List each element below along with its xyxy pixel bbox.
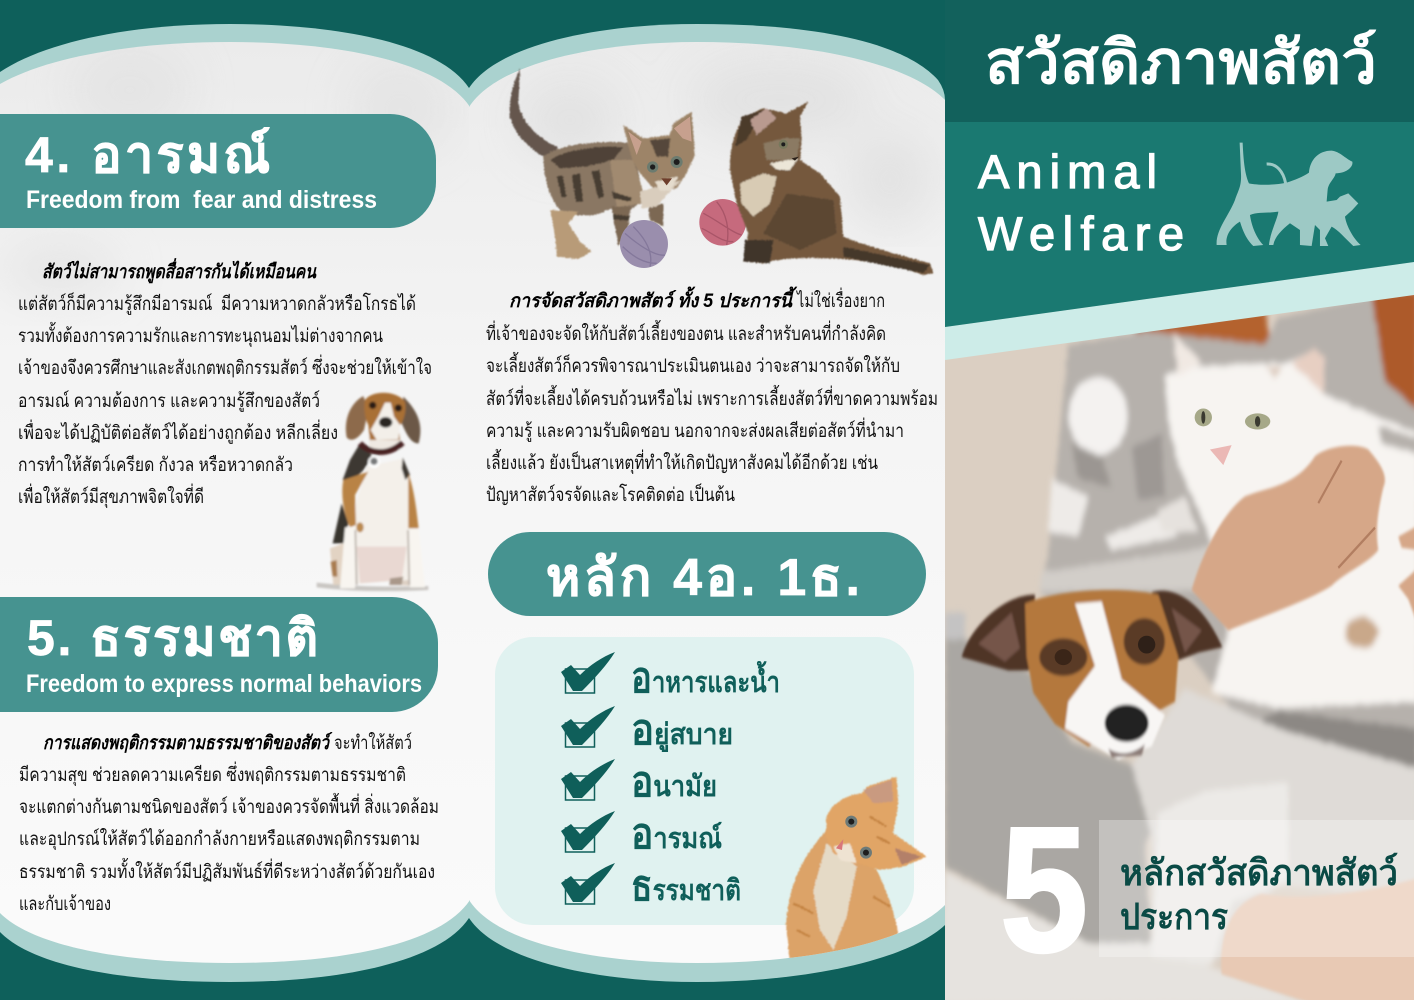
orange kitten face: [836, 816, 872, 859]
text block: nature: จะทำให้สัตว์: [334, 732, 412, 754]
caption text: [1120, 852, 1398, 937]
text block: emotion: เพื่อให้สัตว์มีสุขภาพจิตใจที่ดี: [18, 483, 204, 509]
text block: emotion: รวมทั้งต้องการความรักและการทะนุถนอมไม่ต่างจากคน: [18, 322, 383, 348]
heading pill 4: [0, 114, 436, 228]
title: สวัสดิภาพสัตว์: [985, 29, 1377, 96]
item: nature: [561, 862, 741, 909]
text block: intro: ปัญหาสัตว์จรจัดและโรคติดต่อ เป็นต้น: [486, 482, 735, 506]
caption band: [1099, 820, 1414, 957]
item: hygiene: อนามัย: [631, 758, 717, 805]
panel: right header: [945, 0, 1414, 327]
text block: nature: มีความสุข ช่วยลดความเครียด ซึ่งพฤติกรรมตามธรรมชาติ: [19, 761, 406, 787]
illustration: orange kitten: [786, 777, 927, 963]
text block: emotion: เพื่อจะได้ปฏิบัติต่อสัตว์ได้อย่างถูกต้อง หลีกเลี่ยง: [18, 419, 338, 444]
illustration: beagle: [317, 393, 428, 591]
heading pill 5: Freedom to express normal behaviors: [26, 670, 422, 698]
text block: intro: [486, 286, 938, 506]
heading pill 4: 4. อารมณ์: [25, 127, 270, 183]
big number 5: 5: [1000, 790, 1088, 989]
text block: emotion: เจ้าของจึงควรศึกษาและสังเกตพฤติกรรมสัตว์ ซึ่งจะช่วยให้เข้าใจ: [18, 354, 432, 379]
item: food and water: อาหารและน้ำ: [631, 654, 780, 701]
decorative strip: [945, 262, 1414, 360]
text block: intro: การจัดสวัสดิภาพสัตว์ ทั้ง 5 ประการนี้: [509, 286, 798, 312]
item: nature: ธรรมชาติ: [631, 862, 741, 909]
text block: emotion: อารมณ์ ความต้องการ และความรู้สึกของสัตว์: [18, 390, 320, 412]
fluffy kitten: [730, 102, 933, 275]
subtitle: Animal Welfare: Welfare: [978, 207, 1184, 260]
text block: nature: [19, 731, 439, 915]
text block: intro: สัตว์ที่จะเลี้ยงได้ครบถ้วนหรือไม่ เพราะการเลี้ยงสัตว์ที่ขาดความพร้อม: [486, 385, 938, 410]
heading pill: 4อ 1ธ: [488, 532, 926, 616]
item: comfortable living: อยู่สบาย: [631, 706, 733, 753]
item: emotion: อารมณ์: [631, 810, 722, 857]
text block: nature: และอุปกรณ์ให้สัตว์ได้ออกกำลังกายหรือแสดงพฤติกรรมตาม: [19, 828, 420, 851]
text block: nature: ธรรมชาติ รวมทั้งให้สัตว์มีปฏิสัมพันธ์ที่ดีระหว่างสัตว์ด้วยกันเอง: [19, 858, 435, 883]
text block: intro: ไม่ใช่เรื่องยาก: [795, 287, 885, 312]
text block: emotion: การทำให้สัตว์เครียด กังวล หรือหวาดกลัว: [18, 454, 293, 476]
heading pill 5: [0, 597, 438, 712]
subtitle: Animal Welfare: [978, 145, 1184, 260]
heading pill 5: 5. ธรรมชาติ: [27, 610, 318, 666]
item: hygiene: [561, 758, 717, 805]
item: emotion: [561, 810, 722, 857]
panel: left page: [0, 24, 470, 982]
panel: middle page: [469, 24, 945, 982]
heading pill: 4อ 1ธ: หลัก 4อ. 1ธ.: [546, 549, 860, 607]
text block: intro: จะเลี้ยงสัตว์ก็ควรพิจารณาประเมินตนเอง ว่าจะสามารถจัดให้กับ: [486, 352, 900, 377]
text block: nature: จะแตกต่างกันตามชนิดของสัตว์ เจ้าของควรจัดพื้นที่ สิ่งแวดล้อม: [19, 793, 439, 818]
tabby kitten: [510, 68, 695, 259]
caption text: ประการ: [1120, 896, 1229, 937]
text block: intro: ความรู้ และความรับผิดชอบ นอกจากจะส่งผลเสียต่อสัตว์ที่นำมา: [486, 417, 904, 442]
item: comfortable living: [561, 706, 733, 753]
subtitle: Animal Welfare: Animal: [978, 145, 1157, 198]
fluffy kitten face: [779, 140, 799, 161]
icon: dog and cat silhouette: [1217, 143, 1361, 246]
text block: nature: การแสดงพฤติกรรมตามธรรมชาติของสัตว์: [43, 731, 333, 754]
text block: intro: ที่เจ้าของจะจัดให้กับสัตว์เลี้ยงของตน และสำหรับคนที่กำลังคิด: [486, 320, 886, 345]
heading pill 4: Freedom from fear and distress: [26, 186, 377, 214]
text block: nature: และกับเจ้าของ: [19, 894, 111, 915]
panel: checklist: [495, 637, 914, 925]
caption text: หลักสวัสดิภาพสัตว์: [1120, 852, 1398, 893]
text block: intro: เลี้ยงแล้ว ยังเป็นสาเหตุที่ทำให้เกิดปัญหาสังคมได้อีกด้วย เช่น: [486, 449, 878, 475]
text block: emotion: [18, 258, 432, 509]
illustration: kittens with yarn: [510, 68, 933, 275]
yarn balls: [620, 199, 746, 268]
item: food and water: [561, 652, 780, 701]
tabby kitten face: [628, 117, 692, 185]
photo: woman holding cat and dog: [938, 290, 1414, 1000]
text block: emotion: สัตว์ไม่สามารถพูดสื่อสารกันได้เหมือนคน: [42, 258, 317, 284]
text block: emotion: แต่สัตว์ก็มีความรู้สึกมีอารมณ์ มีความหวาดกลัวหรือโกรธได้: [18, 291, 416, 315]
